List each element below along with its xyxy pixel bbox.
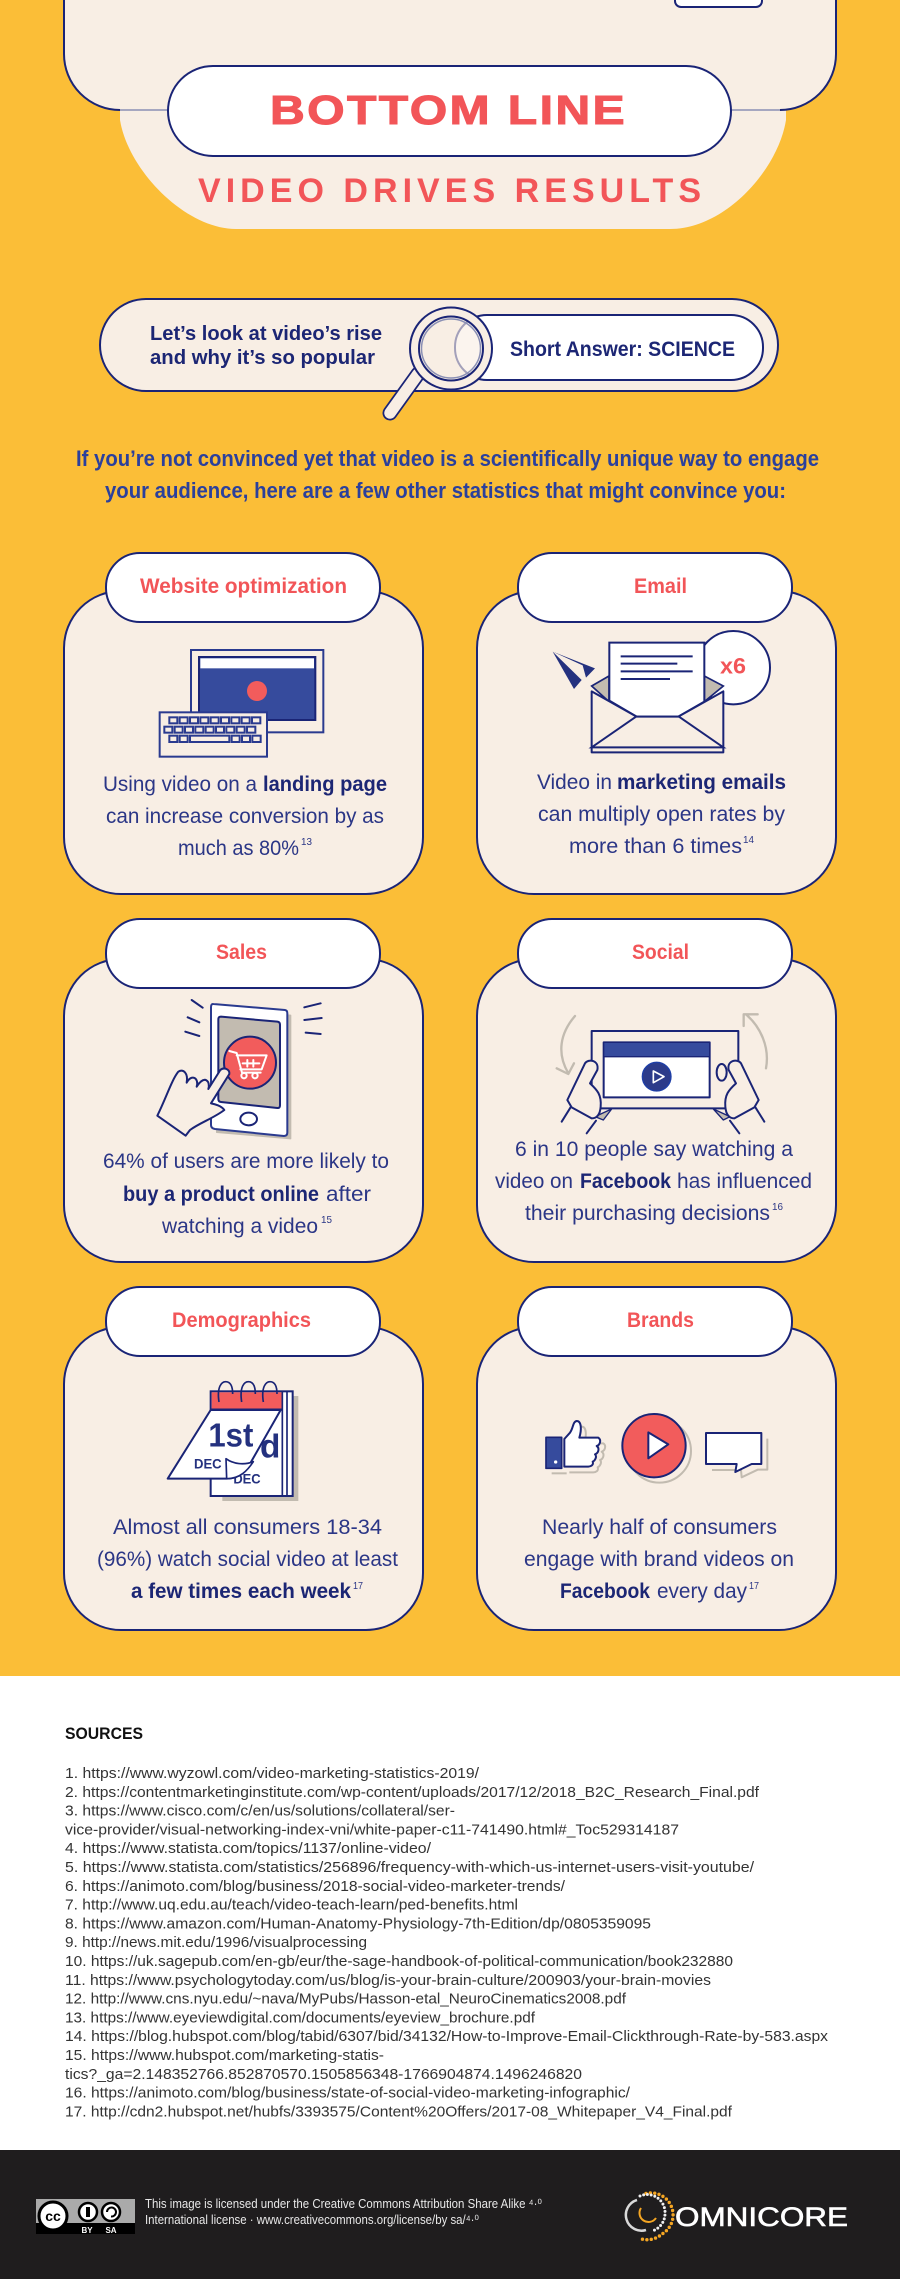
sources list: 2. https://contentmarketinginstitute.com/wp-content/uploads/2017/12/2018_B2C_Research_Final.pdf [65,1785,760,1801]
intro paragraph: If you’re not convinced yet that video is a scientifically unique way to engage [76,446,819,471]
remnant button [675,0,762,7]
icon: creative commons badge [36,2199,135,2235]
title pill [168,66,731,156]
intro paragraph [76,446,819,503]
card title: Social [632,941,689,964]
heading: bottom line: BOTTOM LINE [270,87,627,133]
sources list: vice-provider/visual-networking-index-vni/white-paper-c11-741490.html#_Toc529314187 [65,1822,679,1838]
sources list: 8. https://www.amazon.com/Human-Anatomy-Physiology-7th-Edition/dp/0805359095 [65,1916,651,1932]
card text: 13 [301,836,312,848]
question text: and why it’s so popular [150,347,375,369]
card body [64,591,423,894]
card text: after [326,1182,371,1206]
sources list: 12. http://www.cns.nyu.edu/~nava/MyPubs/Hasson-etal_NeuroCinematics2008.pdf [65,1992,627,2008]
card text: Using video on a [103,772,257,796]
logo: omnicore: OMNICORE [675,2202,848,2232]
yellow background [0,0,900,1676]
card text: marketing emails [617,770,786,794]
card text: Video in [537,770,612,794]
card title: Demographics [172,1309,311,1332]
card text [103,772,387,860]
card title: Website optimization [140,575,347,598]
card text: can multiply open rates by [538,802,785,826]
card text: has influenced [677,1169,812,1193]
icon: creative commons badge: cc [45,2208,61,2224]
sources list: 1. https://www.wyzowl.com/video-marketing-statistics-2019/ [65,1766,480,1782]
sources list: 4. https://www.statista.com/topics/1137/online-video/ [65,1841,432,1857]
card text: Facebook [580,1169,671,1193]
sources list: 10. https://uk.sagepub.com/en-gb/eur/the-sage-handbook-of-political-communication/book232880 [65,1954,733,1970]
card title: Brands [627,1309,694,1332]
card body [477,591,836,894]
card text: engage with brand videos on [524,1547,794,1571]
sources list: tics?_ga=2.148352766.852870570.1505856348-1766904874.1496246820 [65,2067,582,2083]
card body [64,1327,423,1630]
icon: tear-off calendar: DEC [233,1470,261,1486]
sources list: 13. https://www.eyeviewdigital.com/documents/eyeview_brochure.pdf [65,2010,536,2026]
card tab [518,919,792,988]
panel: social [477,919,836,1262]
card body [477,1327,836,1630]
license text [145,2197,542,2227]
icon: tear-off calendar: DEC [194,1455,222,1471]
card text: 6 in 10 people say watching a [515,1137,793,1161]
icon: envelope with x6 badge [553,631,770,752]
answer pill [455,315,763,380]
sources list: 3. https://www.cisco.com/c/en/us/solutions/collateral/ser- [65,1804,455,1820]
panel: sales [64,919,423,1262]
icon: creative commons badge: BY [81,2226,93,2235]
card text: 64% of users are more likely to [103,1149,389,1173]
card text: can increase conversion by as [106,804,384,828]
card title: Sales [216,941,267,964]
card text: 16 [772,1201,783,1213]
sources list: 5. https://www.statista.com/statistics/256896/frequency-with-which-us-internet-users-visit-youtube/ [65,1860,755,1876]
card text: Almost all consumers 18-34 [113,1515,382,1539]
icon: phone with shopping cart and hand [157,1000,322,1139]
card text: watching a video [161,1214,318,1238]
card body [64,959,423,1262]
logo: omnicore [626,2193,848,2240]
sources list: 6. https://animoto.com/blog/business/2018-social-video-marketer-trends/ [65,1879,566,1895]
icon: tear-off calendar [168,1382,298,1501]
card text [524,1515,794,1603]
sources list: 17. http://cdn2.hubspot.net/hubfs/3393575/Content%20Offers/2017-08_Whitepaper_V4_Final.pdf [65,2104,733,2120]
card tab [106,1287,380,1356]
card text: buy a product online [123,1182,319,1206]
card text: Facebook [560,1579,650,1603]
card tab [106,919,380,988]
card text: their purchasing decisions [525,1201,770,1225]
sources list: 9. http://news.mit.edu/1996/visualprocessing [65,1935,367,1951]
card tab [518,553,792,622]
sources list [65,1766,829,2120]
sources list: 11. https://www.psychologytoday.com/us/blog/is-your-brain-culture/200903/your-brain-movies [65,1973,711,1989]
card tab [518,1287,792,1356]
sources list: 14. https://blog.hubspot.com/blog/tabid/6307/bid/34132/How-to-Improve-Email-Clickthrough-Rate-by-583.aspx [65,2029,829,2045]
panel: demographics [64,1287,423,1630]
icon: creative commons badge: SA [105,2226,117,2235]
license text: International license · www.creativecommons.org/license/by sa/⁴·⁰ [145,2213,479,2227]
sources list: 16. https://animoto.com/blog/business/state-of-social-video-marketing-infographic/ [65,2086,631,2102]
license text: This image is licensed under the Creative Commons Attribution Share Alike ⁴·⁰ [145,2197,542,2211]
icon: envelope with x6 badge: x6 [720,653,746,678]
icon: magnifying glass [390,308,492,413]
panel: email [477,553,836,894]
sources heading: SOURCES [65,1724,143,1743]
previous panel outline [64,0,836,110]
footer background [0,2150,900,2279]
card tab [106,553,380,622]
icon: tear-off calendar: d [260,1428,280,1465]
card text: much as 80% [178,836,299,860]
header tab shape [120,100,786,229]
card body [477,959,836,1262]
panel seam lines [120,109,780,111]
card title: Email [634,575,687,598]
card text: 15 [321,1214,332,1226]
card text [495,1137,812,1225]
card text [103,1149,389,1238]
card text: every day [657,1579,747,1603]
card text: 17 [749,1580,759,1592]
card text: a few times each week [131,1579,351,1603]
question text: Let’s look at video’s rise [150,323,382,345]
previous panel bottom [64,0,836,110]
card text: video on [495,1169,573,1193]
panel: website optimization [64,553,423,894]
card text: 14 [743,834,754,846]
answer text: Short Answer: SCIENCE [510,338,735,361]
card text: Nearly half of consumers [542,1515,777,1539]
card text [97,1515,398,1603]
icon: hands holding tablet with video [557,1014,767,1133]
sources list: 15. https://www.hubspot.com/marketing-statis- [65,2048,384,2064]
card text: 17 [353,1580,363,1592]
sources list: 7. http://www.uq.edu.au/teach/video-teach-learn/ped-benefits.html [65,1898,518,1914]
white sources background [0,1676,900,2151]
search bar with magnifier [100,299,778,413]
card text: landing page [263,772,387,796]
card text: (96%) watch social video at least [97,1547,398,1571]
question text [150,323,382,369]
card text: more than 6 times [569,834,742,858]
intro paragraph: your audience, here are a few other statistics that might convince you: [105,478,786,503]
card text [537,770,786,858]
icons: thumbs up, play button, comment bubble [546,1414,767,1483]
icon: tear-off calendar: 1st [208,1418,253,1455]
search pill [100,299,778,391]
subheading: video drives results: VIDEO DRIVES RESULTS [198,172,701,210]
icon: monitor and keyboard [160,650,323,757]
panel: brands [477,1287,836,1630]
header: bottom line banner [64,0,836,229]
footer [0,2150,900,2279]
